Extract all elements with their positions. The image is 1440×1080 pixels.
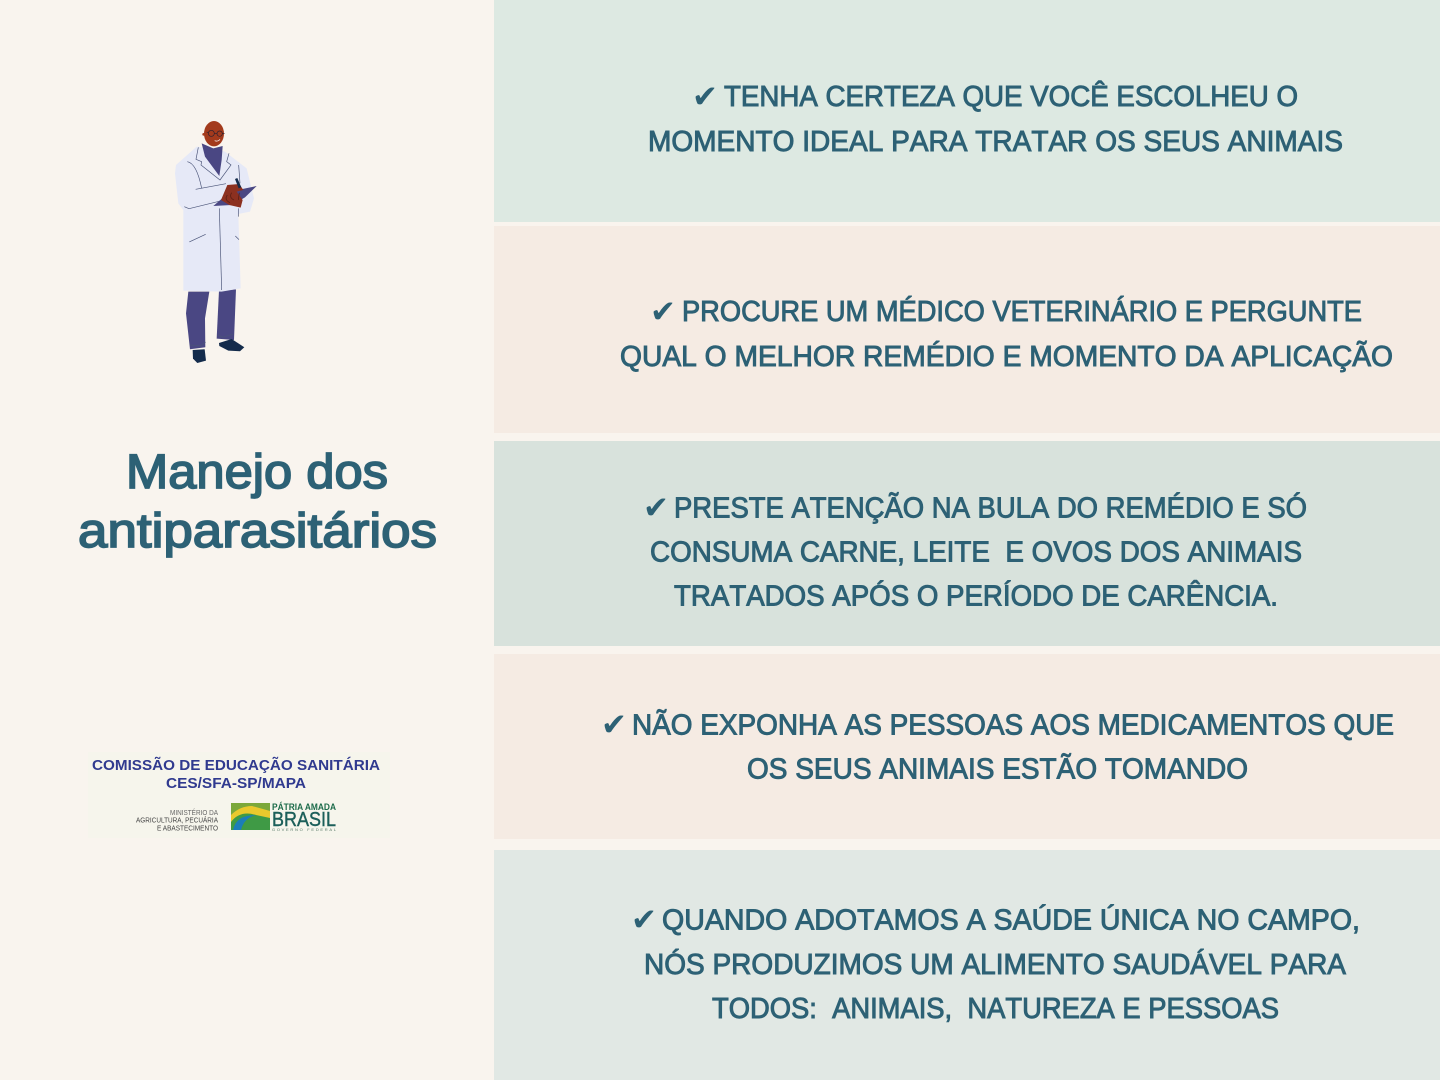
title	[78, 446, 437, 558]
panel: do not expose people: OS SEUS ANIMAIS ESTÃO TOMANDO	[747, 752, 1248, 786]
logo block: Comissão de Educação Sanitária: COMISSÃO DE EDUCAÇÃO SANITÁRIA	[92, 756, 381, 774]
logo block: Comissão de Educação Sanitária	[88, 752, 390, 838]
panel: one health: TODOS: ANIMAIS, NATUREZA E PESSOAS	[712, 993, 1279, 1025]
panel: consult a veterinarian: ✔	[650, 294, 676, 330]
logo block: Comissão de Educação Sanitária: GOVERNO FEDERAL	[272, 827, 337, 832]
panel: do not expose people	[494, 654, 1440, 839]
panel: consult a veterinarian	[494, 226, 1440, 433]
logo block: Comissão de Educação Sanitária: MINISTÉRIO DA	[170, 808, 218, 817]
logo block: Comissão de Educação Sanitária: CES/SFA-SP/MAPA	[166, 776, 307, 792]
panel: consult a veterinarian: PROCURE UM MÉDICO VETERINÁRIO E PERGUNTE	[682, 295, 1362, 328]
title: antiparasitários	[78, 505, 437, 558]
panel: choose the right moment: TENHA CERTEZA QUE VOCÊ ESCOLHEU O	[724, 80, 1298, 113]
panel: choose the right moment	[494, 0, 1440, 222]
panel: do not expose people: NÃO EXPONHA AS PESSOAS AOS MEDICAMENTOS QUE	[632, 708, 1394, 742]
panel: withdrawal period: TRATADOS APÓS O PERÍODO DE CARÊNCIA.	[674, 580, 1278, 612]
illustration: doctor with clipboard	[175, 121, 257, 363]
logo block: Comissão de Educação Sanitária: PÁTRIA AMADA	[272, 802, 336, 812]
panel: withdrawal period: PRESTE ATENÇÃO NA BULA DO REMÉDIO E SÓ	[674, 490, 1307, 524]
logo block: Comissão de Educação Sanitária: E ABASTECIMENTO	[157, 824, 218, 832]
logo block: Comissão de Educação Sanitária: AGRICULTURA, PECUÁRIA	[136, 816, 218, 824]
panel: choose the right moment: MOMENTO IDEAL PARA TRATAR OS SEUS ANIMAIS	[648, 126, 1343, 158]
panel: do not expose people: ✔	[601, 707, 627, 743]
panel: withdrawal period	[494, 441, 1440, 646]
panel: withdrawal period: ✔	[643, 490, 669, 526]
panel: consult a veterinarian: QUAL O MELHOR REMÉDIO E MOMENTO DA APLICAÇÃO	[620, 339, 1393, 373]
panel: one health: QUANDO ADOTAMOS A SAÚDE ÚNICA NO CAMPO,	[662, 904, 1360, 936]
title: Manejo dos	[126, 446, 388, 499]
panel: one health: ✔	[631, 902, 657, 938]
panel: choose the right moment: ✔	[692, 79, 718, 115]
panel: withdrawal period: CONSUMA CARNE, LEITE E OVOS DOS ANIMAIS	[650, 536, 1302, 568]
logo block: Comissão de Educação Sanitária: BRASIL	[272, 809, 336, 831]
panel: one health	[494, 850, 1440, 1080]
panel: one health: NÓS PRODUZIMOS UM ALIMENTO SAUDÁVEL PARA	[644, 948, 1347, 981]
